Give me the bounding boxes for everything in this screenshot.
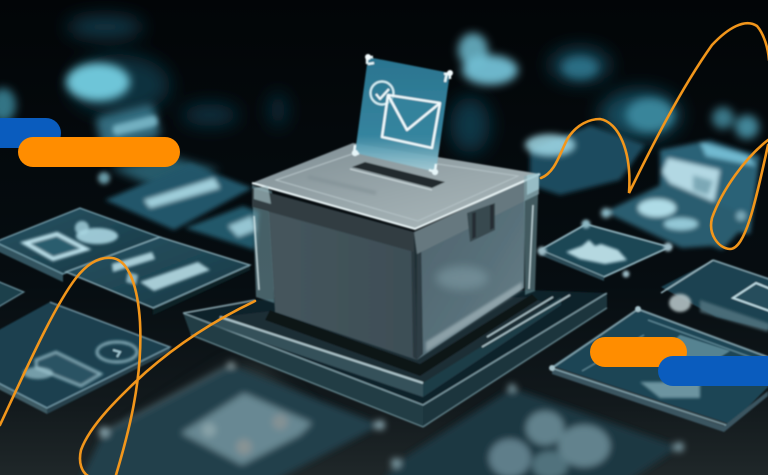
squiggle: right loop (711, 140, 768, 249)
box: clasp (467, 203, 495, 242)
squiggle: top right peak (541, 23, 768, 193)
pill: bottom right orange (590, 337, 687, 367)
ballot: panel (355, 57, 450, 172)
ballot box (252, 143, 540, 360)
box: glass left pillar highlights (254, 216, 259, 290)
icon: envelope (382, 95, 440, 148)
box: slot (352, 162, 445, 188)
box: right face highlight (426, 282, 522, 352)
pill: bottom right blue (658, 356, 768, 386)
box: glass right pillar (524, 173, 539, 295)
tile: lower-left card (0, 302, 170, 414)
tile: blurred bottom right card (380, 384, 684, 475)
box: lid top (252, 143, 540, 229)
box: right face (417, 185, 525, 360)
squiggle: left loop through the base (0, 258, 255, 475)
tile: checkbox card (0, 208, 160, 282)
box: lid highlight edge (252, 174, 540, 229)
blurred upper-left tiles (98, 115, 259, 250)
tile: right, layered icon (661, 260, 768, 332)
tile: left edge sliver (0, 278, 24, 312)
glass base plates under the box (183, 290, 607, 427)
box: rim right (414, 174, 539, 254)
box: glass left pillar back (252, 185, 274, 303)
base: upper glass plate (220, 297, 553, 383)
tile: lower right large card (549, 306, 768, 432)
tile: text card (66, 237, 250, 315)
blurred background glow tiles (0, 16, 759, 190)
box: lid faint groove (308, 177, 376, 193)
icon: check circle (370, 82, 394, 104)
box: front face (268, 200, 417, 360)
ballot: corner brackets (354, 57, 450, 172)
pill: top left blue (0, 118, 61, 148)
pill: top left orange (18, 137, 180, 167)
gray wash near the bottom left (130, 365, 311, 475)
tile: blurred bottom card (78, 362, 385, 475)
tile: right upper blurred (525, 125, 760, 250)
box: rim front (252, 188, 414, 252)
box: vertical front corner (411, 232, 423, 360)
tiles group (slightly soft focus) (0, 208, 250, 414)
tile: icon card, middle right (538, 220, 672, 281)
base: bright stripes (220, 317, 423, 383)
holographic ballot card (352, 54, 453, 175)
base: dark shadow under the box (265, 294, 538, 376)
